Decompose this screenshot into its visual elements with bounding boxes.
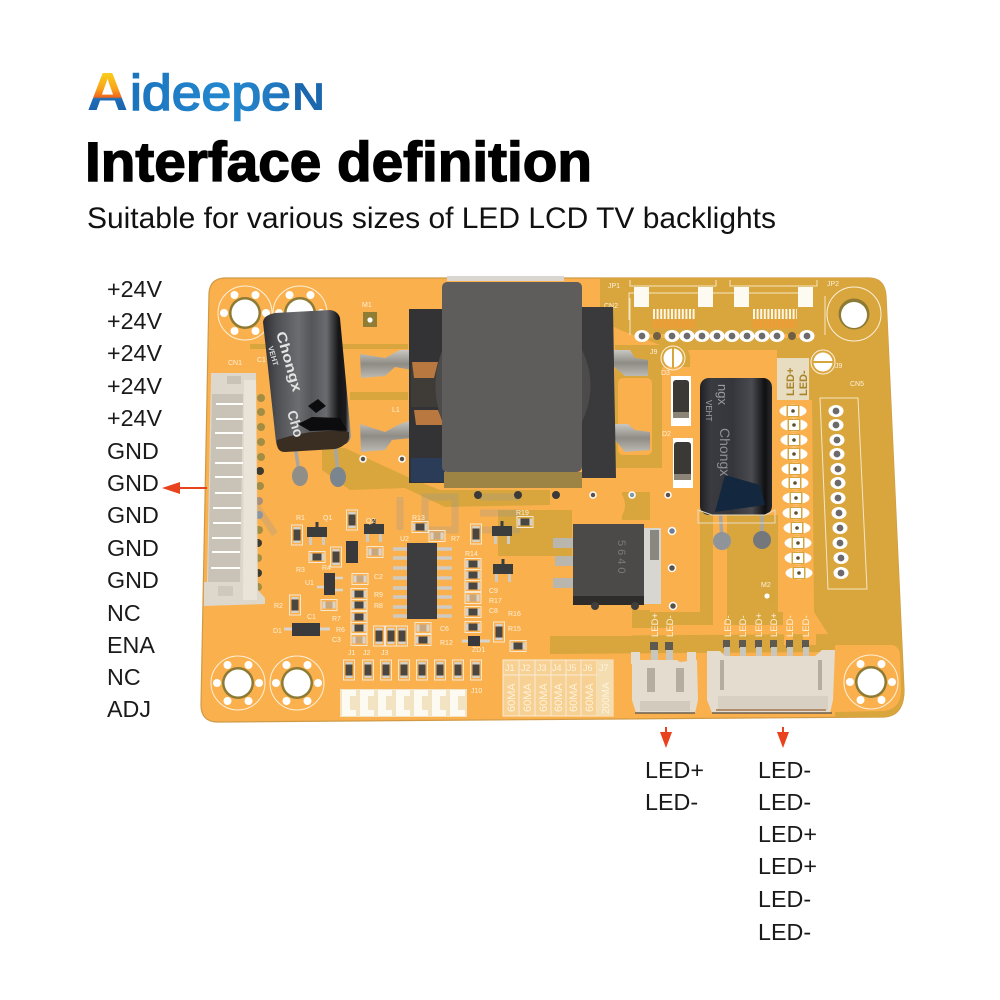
silk LED labels above connectors: LED-: [738, 615, 749, 637]
labels: 6-pin connector: LED-: [758, 886, 811, 912]
left pin labels: ADJ: [107, 696, 151, 722]
diodes D3 D2: [661, 370, 693, 488]
silkscreen labels: C9: [489, 588, 498, 595]
S-shaped test pads: [340, 689, 467, 717]
left pin labels: [107, 276, 163, 722]
current setting table J1-J7: J3: [537, 663, 547, 673]
power mosfet: [553, 492, 676, 610]
capacitor right: [698, 378, 775, 550]
current setting table J1-J7: [503, 660, 613, 716]
LED+ LED- silk box: LED-: [798, 370, 810, 396]
logo: Aideepen: [87, 62, 325, 122]
labels: 6-pin connector: LED+: [758, 853, 817, 879]
logo: Aideepen: N: [292, 76, 325, 119]
left pin labels: NC: [107, 664, 141, 690]
diodes D3 D2: D2: [662, 431, 671, 438]
silkscreen labels: J10: [471, 688, 482, 695]
IC U2: [393, 536, 452, 619]
arrow: 2-pin connector: [660, 727, 672, 748]
LED+ LED- silk box: LED+: [785, 368, 797, 396]
current setting table J1-J7: J4: [552, 663, 562, 673]
left pin labels: GND: [107, 502, 159, 528]
labels: 6-pin connector: LED+: [758, 821, 817, 847]
silkscreen labels: C8: [489, 608, 498, 615]
silkscreen labels: R1: [296, 515, 305, 522]
left pin labels: +24V: [107, 340, 163, 366]
silk LED labels above connectors: LED+: [650, 613, 661, 637]
left pin labels: GND: [107, 567, 159, 593]
labels: 2-pin connector: LED-: [645, 789, 698, 815]
left pin labels: +24V: [107, 373, 163, 399]
silkscreen labels: R17: [489, 598, 502, 605]
arrow: left connector: [162, 482, 207, 494]
small SMD components: [284, 510, 533, 652]
left pin labels: +24V: [107, 405, 163, 431]
current setting table J1-J7: 60MA: [506, 683, 518, 712]
silkscreen labels: [228, 357, 529, 695]
transformer solder leads: [360, 350, 650, 452]
labels: 6-pin connector: LED-: [758, 789, 811, 815]
silkscreen labels: R14: [465, 551, 478, 558]
silkscreen labels: L1: [392, 407, 400, 414]
current setting table J1-J7: J5: [567, 663, 577, 673]
subtitle: Suitable for various sizes of LED LCD TV backlights: [87, 202, 776, 235]
capacitor right: VEHT: [704, 400, 713, 421]
capacitor right: Chongx: [717, 428, 733, 476]
silkscreen labels: J3: [381, 650, 388, 657]
silkscreen labels: J1: [348, 650, 356, 657]
power mosfet: 5640: [615, 540, 627, 576]
top connector footprint JP1 JP2: J9: [835, 363, 842, 370]
silkscreen labels: Q1: [323, 515, 332, 522]
silkscreen labels: R19: [516, 510, 529, 517]
silkscreen labels: D1: [273, 628, 282, 635]
silkscreen labels: R16: [508, 611, 521, 618]
capacitor left: Chongx: [273, 329, 306, 394]
top connector footprint JP1 JP2: [604, 280, 864, 388]
silkscreen labels: R13: [412, 515, 425, 522]
mount pads M1 M2: [362, 302, 775, 602]
top connector footprint JP1 JP2: CN2: [604, 303, 618, 310]
silkscreen labels: CN1: [228, 360, 242, 367]
silkscreen labels: R15: [508, 626, 521, 633]
IC U2: U2: [400, 536, 409, 543]
orange copper pads and traces: [568, 350, 901, 712]
silkscreen labels: C1: [307, 614, 316, 621]
capacitor left: [263, 310, 351, 487]
current setting table J1-J7: 60MA: [522, 683, 534, 712]
connector 6-pin LED: [707, 640, 835, 713]
silk LED labels above connectors: LED+: [754, 613, 765, 637]
capacitor right: ngx: [715, 384, 730, 405]
connector 2-pin LED: [631, 642, 698, 713]
silkscreen labels: R2: [274, 603, 283, 610]
mounting holes: [211, 286, 898, 710]
left pin labels: +24V: [107, 308, 163, 334]
silk LED labels above connectors: LED+: [769, 613, 780, 637]
mount pads M1 M2: M2: [761, 582, 771, 589]
silkscreen labels: R6: [336, 627, 345, 634]
current setting table J1-J7: 60MA: [568, 683, 580, 712]
CN5 pad column: [820, 398, 867, 589]
labels: 6-pin connector: LED-: [758, 757, 811, 783]
current setting table J1-J7: 60MA: [538, 683, 550, 712]
silkscreen labels: C1: [257, 357, 266, 364]
olive copper areas: [250, 278, 910, 720]
silkscreen labels: Q2: [366, 518, 375, 525]
diodes D3 D2: D3: [661, 370, 670, 377]
title: Interface definition: [85, 130, 592, 193]
labels: 2-pin connector: [645, 757, 704, 815]
top connector footprint JP1 JP2: JP2: [827, 281, 839, 288]
labels: 6-pin connector: LED-: [758, 919, 811, 945]
current setting table J1-J7: J7: [599, 663, 609, 673]
LED+ LED- silk box: [777, 358, 810, 400]
silkscreen labels: C6: [440, 626, 449, 633]
silk LED labels above connectors: LED-: [785, 615, 796, 637]
left pin labels: GND: [107, 438, 159, 464]
silkscreen labels: R7: [451, 536, 460, 543]
silk LED labels above connectors: [650, 613, 812, 637]
connector CN1: [204, 373, 265, 606]
top connector footprint JP1 JP2: CN5: [850, 381, 864, 388]
pad column: [780, 405, 812, 579]
silkscreen labels: R8: [374, 603, 383, 610]
silkscreen labels: U1: [305, 580, 314, 587]
current setting table J1-J7: J6: [583, 663, 593, 673]
top connector footprint JP1 JP2: J9: [650, 349, 658, 356]
left pin labels: GND: [107, 535, 159, 561]
labels: 6-pin connector: [758, 757, 817, 945]
top connector footprint JP1 JP2: JP1: [608, 283, 620, 290]
silkscreen labels: R7: [332, 616, 341, 623]
silkscreen labels: R4: [322, 565, 331, 572]
logo: Aideepen: A: [87, 62, 128, 122]
faint watermark: [228, 497, 520, 534]
current setting table J1-J7: 60MA: [584, 683, 596, 712]
left pin labels: NC: [107, 600, 141, 626]
current setting table J1-J7: 60MA: [553, 683, 565, 712]
silkscreen labels: R3: [296, 567, 305, 574]
arrow: 6-pin connector: [777, 727, 789, 748]
jumper resistor row J1-J8: [344, 660, 482, 680]
board substrate: [201, 278, 904, 722]
mount pads M1 M2: M1: [362, 302, 372, 309]
silkscreen labels: C3: [332, 637, 341, 644]
silk LED labels above connectors: LED-: [665, 615, 676, 637]
current setting table J1-J7: 200MA: [601, 682, 612, 714]
left pin labels: GND: [107, 470, 159, 496]
capacitor left: VEHT: [266, 345, 280, 367]
transformer: [360, 276, 616, 499]
silkscreen labels: J2: [363, 650, 370, 657]
left pin labels: ENA: [107, 632, 155, 658]
silkscreen labels: C2: [374, 574, 383, 581]
logo: Aideepen: ideepe: [130, 65, 291, 121]
left pin labels: +24V: [107, 276, 163, 302]
current setting table J1-J7: J1: [505, 663, 515, 673]
capacitor left: Cho: [284, 408, 307, 439]
circuit board: [201, 276, 910, 722]
labels: 2-pin connector: LED+: [645, 757, 704, 783]
test points: [661, 346, 835, 374]
silkscreen labels: R12: [440, 640, 453, 647]
current setting table J1-J7: J2: [521, 663, 531, 673]
silk LED labels above connectors: LED-: [723, 615, 734, 637]
silkscreen labels: ZD1: [472, 647, 485, 654]
silk LED labels above connectors: LED-: [801, 615, 812, 637]
silkscreen labels: R9: [374, 592, 383, 599]
